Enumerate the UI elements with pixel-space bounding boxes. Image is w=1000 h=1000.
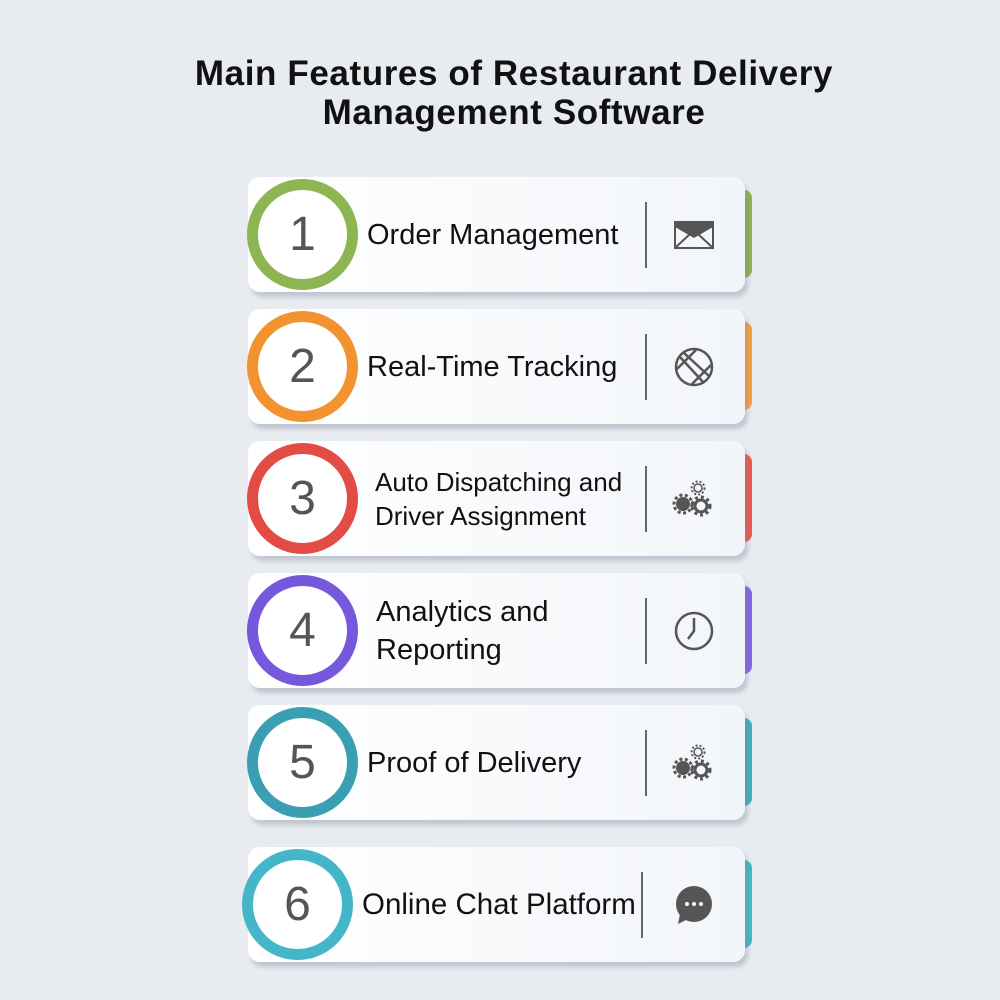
text: Analytics and Reporting: Reporting — [376, 634, 502, 666]
number circle 5 — [247, 707, 358, 818]
icon: chat bubble — [676, 886, 712, 924]
row 4: Analytics and Reporting — [247, 573, 752, 695]
icon: clock — [674, 612, 714, 650]
number circle 2: 2 — [289, 340, 316, 393]
row 1: Order Management — [247, 177, 752, 299]
text: Auto Dispatching and Driver Assignment — [375, 466, 622, 530]
number circle 1 — [247, 179, 358, 290]
text: Real-Time Tracking: Real-Time Tracking — [367, 350, 617, 382]
number circle 4 — [247, 575, 358, 686]
text: Analytics and Reporting — [376, 596, 548, 666]
text: Order Management: Order Management — [367, 218, 618, 250]
title: Main Features of Restaurant Delivery — [195, 54, 833, 93]
number circle 3 — [247, 443, 358, 554]
title — [195, 54, 833, 132]
number circle 5: 5 — [289, 736, 316, 789]
icon: gears — [672, 480, 712, 516]
text: Auto Dispatching and Driver Assignment: Auto Dispatching and — [375, 466, 622, 496]
title: Management Software — [323, 93, 705, 132]
text: Auto Dispatching and Driver Assignment: Driver Assignment — [375, 500, 586, 530]
row 2: Real-Time Tracking — [247, 309, 752, 431]
text: Proof of Delivery: Proof of Delivery — [367, 746, 581, 778]
row 3: Auto Dispatching — [247, 441, 752, 563]
text: Online Chat Platform: Online Chat Platform — [362, 888, 636, 920]
number circle 2 — [247, 311, 358, 422]
text: Analytics and Reporting: Analytics and — [376, 596, 548, 628]
icon: envelope — [674, 221, 714, 249]
row 5: Proof of Delivery — [247, 705, 752, 827]
number circle 6: 6 — [284, 878, 311, 931]
icon: gears — [672, 744, 712, 780]
row 6: Online Chat Platform — [242, 847, 752, 969]
number circle 3: 3 — [289, 472, 316, 525]
icon: globe — [674, 348, 714, 386]
number circle 4: 4 — [289, 604, 316, 657]
number circle 6 — [242, 849, 353, 960]
number circle 1: 1 — [289, 208, 316, 261]
